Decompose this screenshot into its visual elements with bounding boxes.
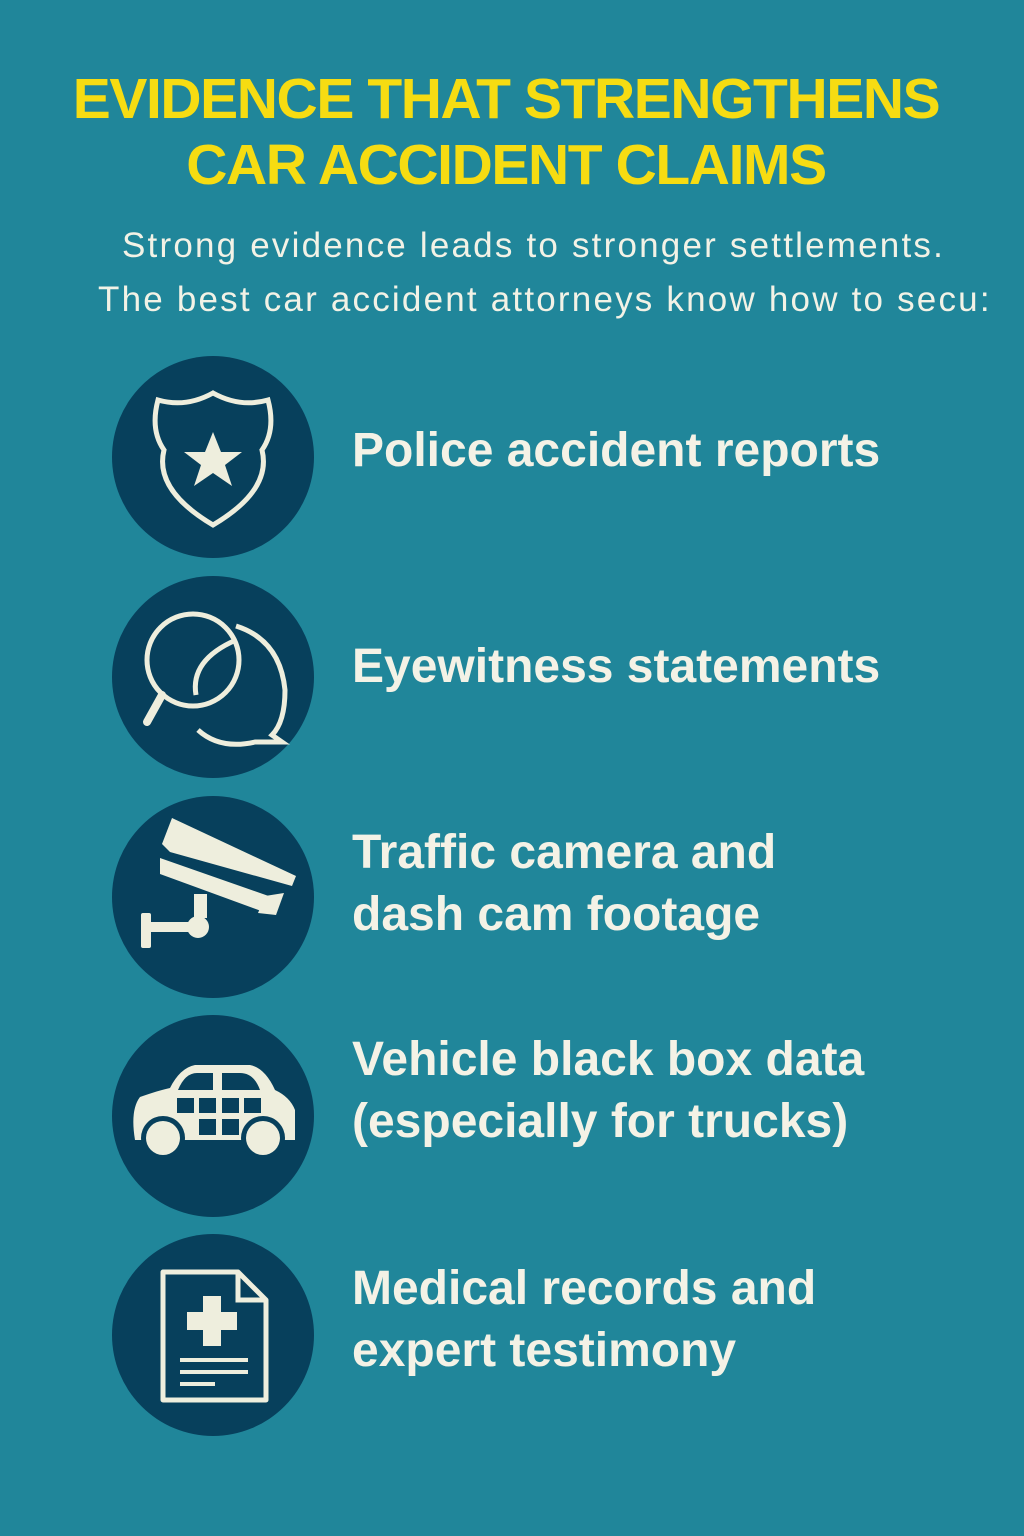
label: black box: Vehicle black box data <box>352 1033 864 1086</box>
subtitle: The best car accident attorneys know how to secu: <box>98 280 992 319</box>
label: police: Police accident reports <box>352 424 880 477</box>
title: CAR ACCIDENT CLAIMS <box>186 133 826 197</box>
title: EVIDENCE THAT STRENGTHENS <box>73 67 939 131</box>
subtitle <box>98 226 992 319</box>
label: black box <box>352 1033 864 1148</box>
icon: magnifier and speech bubble <box>112 576 314 778</box>
label: camera: Traffic camera and <box>352 826 776 879</box>
label: eyewitness: Eyewitness statements <box>352 640 880 693</box>
label: medical <box>352 1262 816 1377</box>
icon: security camera <box>112 796 314 998</box>
icon: medical record <box>112 1234 314 1436</box>
label: medical: expert testimony <box>352 1324 736 1377</box>
subtitle: Strong evidence leads to stronger settlements. <box>122 226 945 265</box>
icon: police badge <box>112 356 314 558</box>
label: camera <box>352 826 776 941</box>
label: camera: dash cam footage <box>352 888 760 941</box>
label: black box: (especially for trucks) <box>352 1095 848 1148</box>
label: medical: Medical records and <box>352 1262 816 1315</box>
title <box>73 67 939 197</box>
icon: car <box>112 1015 314 1217</box>
